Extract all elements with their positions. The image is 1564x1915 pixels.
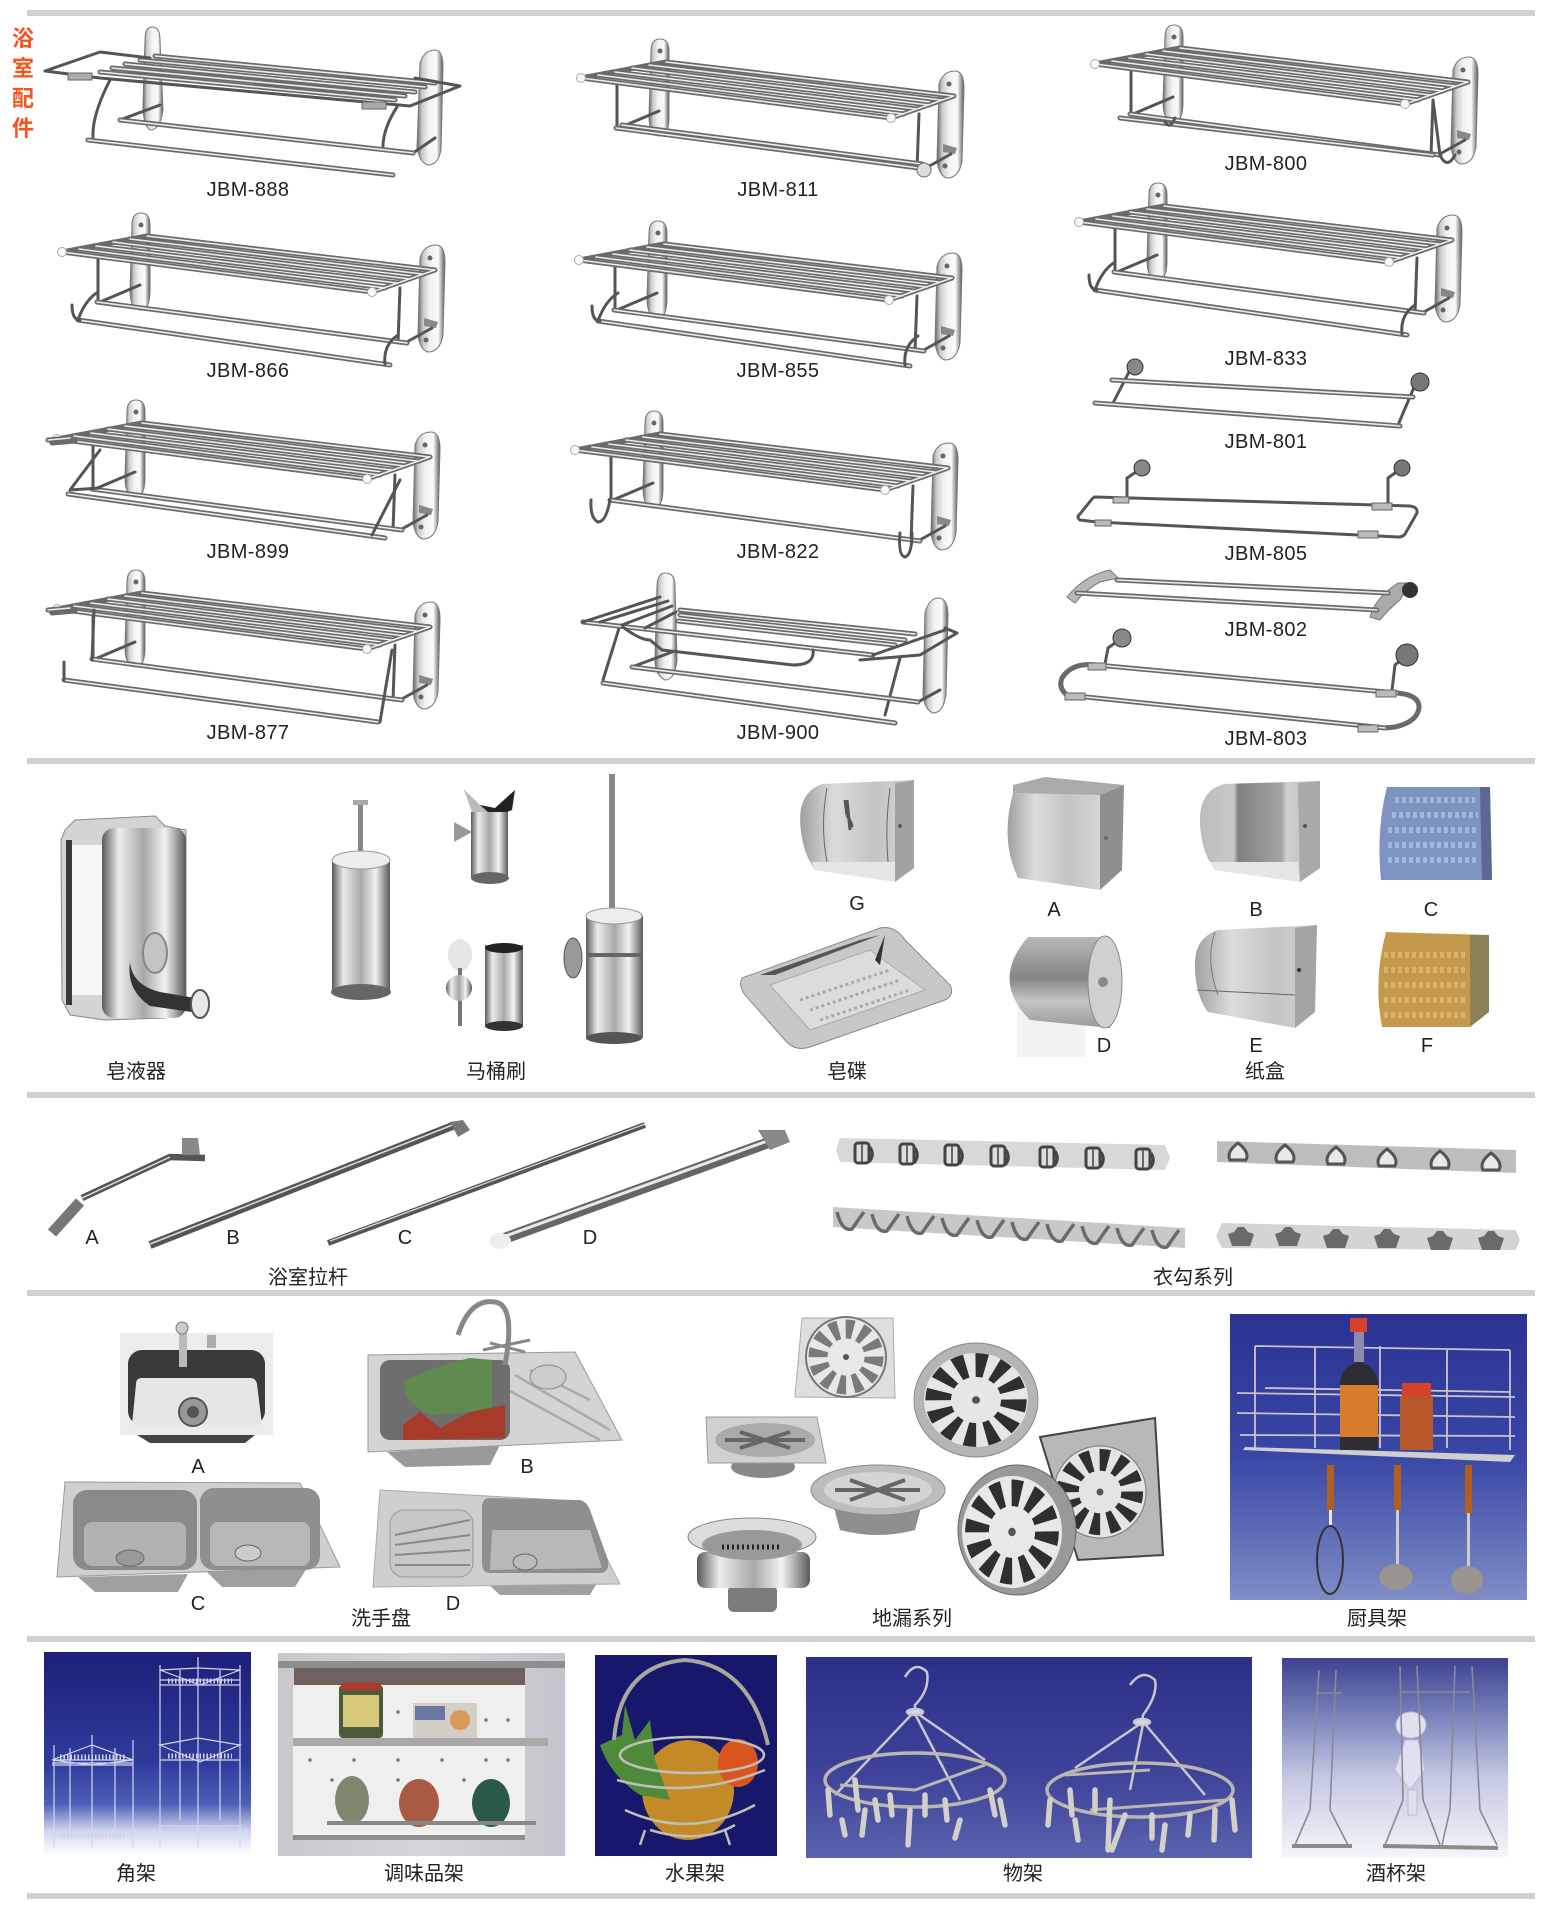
rack: JBM-855: JBM-855 [737, 360, 819, 382]
icon: wall holder with brush head [454, 790, 515, 884]
label: rod D: D [583, 1227, 597, 1249]
rack: JBM-877 [48, 570, 440, 744]
label: paper box: 纸盒 [1245, 1060, 1285, 1083]
icon: hook rail four [1216, 1223, 1520, 1250]
icon: bottle two [399, 1779, 439, 1827]
label: sink C: C [191, 1593, 205, 1615]
icon: drain circle two [914, 1343, 1038, 1457]
label: rod B: B [226, 1227, 240, 1249]
rack: JBM-811: JBM-811 [737, 179, 819, 201]
panel: kitchen rack [1230, 1314, 1527, 1630]
panel: paper boxes [800, 777, 1492, 1083]
title: 件 [12, 116, 34, 141]
panel: soap dispenser [61, 816, 209, 1083]
label: wine glass rack: 酒杯架 [1366, 1862, 1426, 1885]
icon: brush cylinder one [331, 800, 391, 1000]
label: rod A: A [85, 1227, 99, 1249]
icon: brush and cup parts [446, 939, 523, 1031]
icon: paper box D [1009, 936, 1122, 1057]
label: B: B [1249, 899, 1263, 921]
panel: toilet brushes [331, 774, 643, 1083]
rack: JBM-822: JBM-822 [737, 541, 819, 563]
icon: double rack [1383, 1666, 1498, 1848]
rack: JBM-822 [570, 411, 958, 563]
icon: sink B [368, 1302, 622, 1478]
rack: JBM-803 [1061, 629, 1419, 750]
icon: drain circle six [958, 1465, 1076, 1595]
icon: tin [413, 1703, 477, 1738]
icon: sink C [57, 1482, 340, 1615]
label: A: A [1047, 899, 1061, 921]
icon: rod D [489, 1130, 790, 1249]
label: sink B: B [520, 1456, 534, 1478]
panel: sinks [57, 1302, 622, 1630]
label: fruit rack: 水果架 [665, 1862, 725, 1885]
rack: JBM-900 [583, 573, 957, 744]
icon: paper box C [1379, 787, 1492, 921]
icon: paper box B [1200, 781, 1320, 921]
title: 配 [12, 86, 34, 111]
icon: paper box G [800, 780, 914, 915]
icon: ladle one [1379, 1465, 1413, 1590]
icon: bottle one [335, 1776, 369, 1824]
panel: clothes hangers [806, 1657, 1252, 1885]
rack: JBM-802 [1067, 570, 1418, 641]
rack: JBM-805: JBM-805 [1225, 543, 1307, 565]
title: 室 [12, 56, 34, 81]
rack: JBM-899 [48, 400, 440, 563]
label: E: E [1249, 1035, 1263, 1057]
icon: hook rail one [836, 1138, 1170, 1170]
label: bathroom rods: 浴室拉杆 [268, 1266, 348, 1289]
label: hanger rack: 物架 [1003, 1862, 1043, 1885]
icon: drain square three [706, 1417, 826, 1478]
panel: clothes hooks [833, 1138, 1520, 1289]
icon: single rack [1292, 1670, 1352, 1846]
icon: rod C [328, 1124, 645, 1249]
label: C: C [1424, 899, 1438, 921]
rack: JBM-833 [1074, 183, 1462, 370]
panel: bathroom rods [52, 1120, 790, 1289]
icon: sink D [373, 1490, 620, 1615]
icon: hook rail two [1217, 1141, 1516, 1173]
label: soap dispenser: 皂液器 [106, 1060, 166, 1083]
label: floor drains: 地漏系列 [872, 1607, 952, 1630]
rack: JBM-801 [1095, 359, 1429, 453]
label: G: G [849, 893, 865, 915]
panel: corner rack [44, 1652, 251, 1885]
panel: floor drains [688, 1317, 1163, 1630]
label: sinks: 洗手盘 [351, 1607, 411, 1630]
icon: hanger two [1047, 1675, 1235, 1850]
rack: JBM-899: JBM-899 [207, 541, 289, 563]
label: clothes hooks: 衣勾系列 [1153, 1266, 1233, 1289]
rack: JBM-800: JBM-800 [1225, 153, 1307, 175]
icon: drain square one [795, 1317, 895, 1398]
rack: JBM-805 [1078, 460, 1417, 565]
icon: orange [718, 1739, 758, 1787]
icon: bottle [1340, 1318, 1378, 1450]
icon: jar [339, 1683, 383, 1738]
rack: JBM-900: JBM-900 [737, 722, 819, 744]
label: F: F [1421, 1035, 1433, 1057]
icon: paper box E [1195, 925, 1317, 1057]
icon: hanger one [825, 1667, 1005, 1845]
icon: glass [1395, 1712, 1426, 1815]
icon: drain round four [811, 1465, 945, 1535]
panel: fruit basket [595, 1655, 777, 1885]
icon: bottle three [472, 1779, 510, 1827]
label: kitchen rack: 厨具架 [1347, 1607, 1407, 1630]
rack: JBM-803: JBM-803 [1225, 728, 1307, 750]
label: corner rack: 角架 [116, 1862, 156, 1885]
rack: JBM-866 [58, 213, 445, 382]
icon: pineapple [600, 1705, 734, 1840]
label: spice rack: 调味品架 [384, 1862, 464, 1885]
title [12, 26, 34, 141]
panel: spice rack [278, 1653, 565, 1885]
rack: JBM-855 [574, 221, 962, 382]
label: rod C: C [398, 1227, 412, 1249]
label: sink D: D [446, 1593, 460, 1615]
icon: whisk [1317, 1465, 1343, 1594]
rack: JBM-802: JBM-802 [1225, 619, 1307, 641]
rack: JBM-811 [576, 39, 964, 201]
label: toilet brush: 马桶刷 [466, 1060, 526, 1083]
icon: paper box F [1378, 932, 1489, 1057]
icon: tall wall brush [564, 774, 643, 1044]
rack: JBM-866: JBM-866 [207, 360, 289, 382]
icon: basket wire [614, 1660, 768, 1845]
panel: wine glass rack [1282, 1658, 1508, 1885]
icon: rod B [150, 1120, 470, 1249]
panel: soap dish [741, 928, 952, 1083]
icon: sink A [120, 1322, 273, 1478]
icon: drain square seven [1040, 1418, 1163, 1560]
icon: jar [1400, 1383, 1433, 1450]
rack: JBM-888: JBM-888 [207, 179, 289, 201]
rack: JBM-801: JBM-801 [1225, 431, 1307, 453]
rack: JBM-888 [45, 27, 460, 201]
icon: rod A [52, 1138, 205, 1249]
icon: strainer five [688, 1518, 816, 1612]
label: soap dish: 皂碟 [827, 1060, 867, 1083]
icon: hook rail three [833, 1207, 1185, 1248]
label: sink A: A [191, 1456, 205, 1478]
icon: paper box A [1008, 777, 1124, 921]
rack: JBM-877: JBM-877 [207, 722, 289, 744]
title: 浴 [12, 26, 34, 51]
rack: JBM-833: JBM-833 [1225, 348, 1307, 370]
rack: JBM-800 [1090, 25, 1478, 175]
label: D: D [1097, 1035, 1111, 1057]
icon: ladle two [1451, 1465, 1483, 1594]
